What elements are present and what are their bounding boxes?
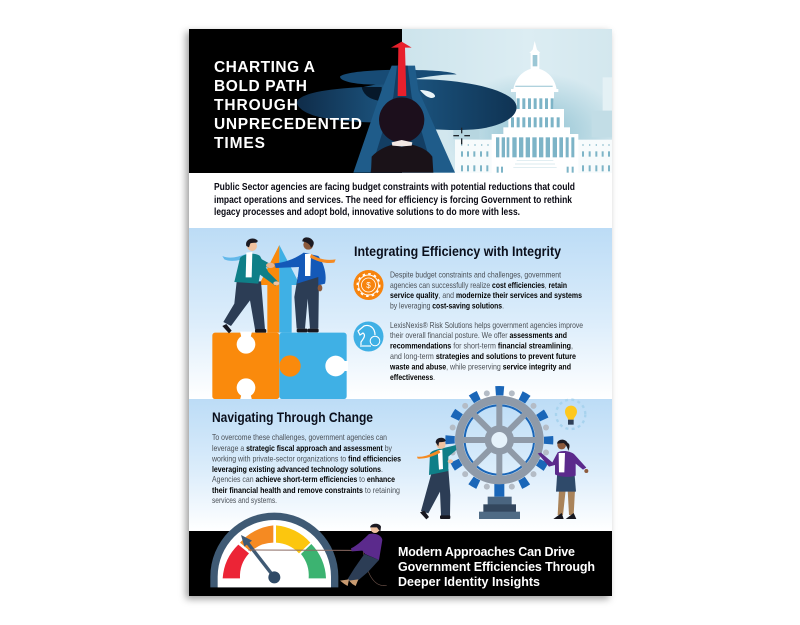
text: navigating paragraph: leveraging existing advanced technology solutions. bbox=[212, 464, 383, 474]
text: LexisNexis paragraph bbox=[389, 320, 583, 382]
text: cost efficiencies paragraph: Despite budget constraints and challenges, government bbox=[390, 270, 562, 280]
man pushing gear bbox=[421, 469, 450, 516]
heading: Integrating Efficiency with Integrity bbox=[354, 243, 561, 259]
icon: gear with dollar: $ bbox=[366, 281, 371, 290]
text: cost efficiencies paragraph: agencies can successfully realize cost efficiencies, retain bbox=[390, 280, 567, 290]
icon: gear with dollar bbox=[354, 270, 384, 300]
illustration: Capitol building bbox=[453, 41, 612, 173]
icon: chess knight with dollar bbox=[354, 322, 384, 352]
panel: navigating through change bbox=[189, 390, 612, 531]
illustration: puzzle pieces, arrows and two businessmen bbox=[212, 237, 348, 400]
text: band heading: Deeper Identity Insights bbox=[398, 575, 540, 589]
woman pushing gear bbox=[558, 490, 566, 515]
intro text: impact operations and services. The need for efficiency is forcing Government to rethink bbox=[214, 195, 572, 206]
text: LexisNexis paragraph: LexisNexis® Risk Solutions helps government agencies improve bbox=[390, 320, 583, 330]
text: LexisNexis paragraph: and long-term strategies and solutions to prevent future bbox=[390, 351, 576, 361]
illustration: gauge and woman pulling rope bbox=[210, 513, 387, 587]
title bbox=[214, 59, 362, 152]
title: BOLD PATH bbox=[214, 78, 307, 95]
man left: scarf, legs, jacket bbox=[222, 253, 249, 261]
text: LexisNexis paragraph: waste and abuse, while preserving service integrity and bbox=[389, 362, 571, 372]
text: LexisNexis paragraph: recommendations for short-term financial streamlining, bbox=[390, 340, 573, 350]
text: band heading: Modern Approaches Can Drive bbox=[398, 545, 575, 559]
title: TIMES bbox=[214, 135, 265, 152]
icon: red arrow bbox=[391, 42, 412, 96]
text: navigating paragraph: To overcome these challenges, government agencies can bbox=[212, 432, 387, 442]
text: band heading: Government Efficiencies Through bbox=[398, 560, 595, 574]
text: LexisNexis paragraph: their overall financial posture. We offer assessments and bbox=[390, 330, 567, 340]
heading: Navigating Through Change bbox=[212, 409, 373, 425]
title: UNPRECEDENTED bbox=[214, 116, 362, 133]
text: navigating paragraph: working with private-sector organizations to find efficiencies bbox=[211, 454, 401, 464]
text: navigating paragraph: leverage a strategic fiscal approach and assessment by bbox=[212, 443, 393, 453]
intro text: legacy processes and adopt bold, innovative solutions to do more with less. bbox=[214, 207, 520, 218]
panel: integrating efficiency bbox=[189, 228, 612, 400]
text: LexisNexis paragraph: effectiveness. bbox=[390, 372, 435, 382]
header panel bbox=[189, 29, 612, 173]
icon: light bulb bbox=[556, 400, 585, 429]
title: THROUGH bbox=[214, 97, 298, 114]
illustration: gear wheel, two people and light bulb bbox=[417, 390, 588, 519]
intro text: Public Sector agencies are facing budget constraints with potential reductions that could bbox=[214, 182, 575, 193]
title: CHARTING A bbox=[214, 59, 315, 76]
text: navigating paragraph bbox=[211, 432, 401, 505]
text: band heading bbox=[398, 545, 595, 589]
text: navigating paragraph: Agencies can achieve short-term efficiencies to enhance bbox=[212, 474, 395, 484]
text: cost efficiencies paragraph: by leveraging cost-saving solutions. bbox=[390, 300, 504, 310]
text: navigating paragraph: services and systems. bbox=[212, 495, 277, 505]
man right: legs, jacket, scarf bbox=[294, 277, 319, 329]
illustration: path and figure seen from behind bbox=[297, 42, 517, 173]
text: navigating paragraph: their financial health and remove constraints to retaining bbox=[212, 485, 400, 495]
text: cost efficiencies paragraph: service quality, and modernize their services and systems bbox=[390, 290, 582, 300]
text: cost efficiencies paragraph bbox=[390, 270, 582, 310]
intro text bbox=[214, 182, 575, 218]
page sheet with drop shadow bbox=[189, 29, 612, 596]
panel: modern approaches band bbox=[189, 513, 612, 596]
